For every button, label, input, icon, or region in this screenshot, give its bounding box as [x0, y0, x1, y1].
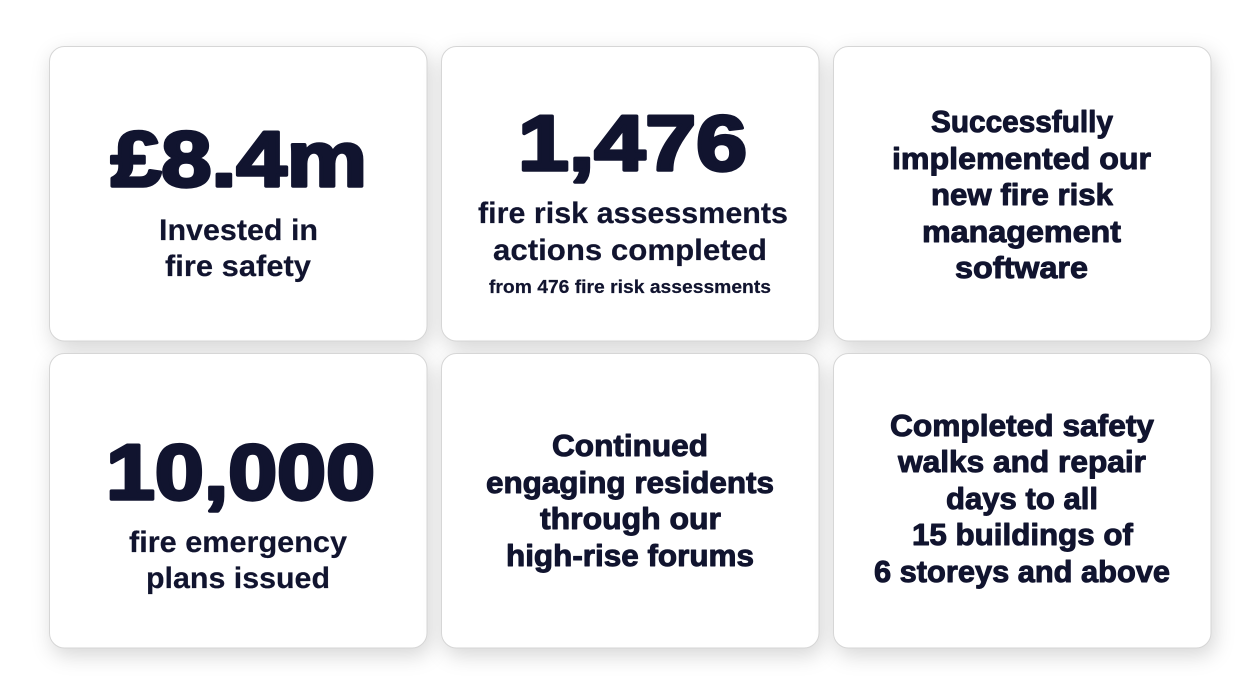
text: invested in fire safety — [159, 214, 318, 283]
text: fire risk assessments actions completed — [478, 197, 788, 267]
text: fire risk assessments actions completed: fire risk assessments — [478, 197, 788, 230]
text: fire emergency plans issued: fire emergency — [129, 526, 347, 559]
text: completed safety walks — [874, 408, 1170, 589]
text: fire risk assessments actions completed: actions completed — [493, 234, 767, 267]
text: successfully implemented software: new fire risk — [931, 177, 1114, 212]
text: continued engaging residents: high-rise forums — [506, 538, 754, 573]
panel: safety walks and repair days — [834, 354, 1211, 648]
text: completed safety walks: 6 storeys and above — [874, 554, 1170, 589]
text: fire emergency plans issued — [129, 526, 347, 595]
text: continued engaging residents: Continued — [552, 428, 708, 463]
text: successfully implemented software: software — [955, 250, 1088, 285]
big number: 1,476: 1,476 — [518, 99, 747, 187]
text: completed safety walks: 15 buildings of — [912, 517, 1134, 552]
text: continued engaging residents: through our — [540, 501, 721, 536]
big number: 10,000: 10,000 — [106, 428, 375, 516]
text: successfully implemented software: management — [922, 214, 1121, 249]
text: completed safety walks: walks and repair — [897, 444, 1146, 479]
text: successfully implemented software: implemented our — [892, 141, 1151, 176]
panel: 1,476 actions completed — [442, 46, 819, 341]
text: completed safety walks: days to all — [946, 481, 1098, 516]
text: invested in fire safety: Invested in — [159, 214, 318, 247]
panel: fire risk management software — [834, 46, 1211, 341]
text: successfully implemented software — [892, 104, 1151, 285]
text: completed safety walks: Completed safety — [890, 408, 1155, 443]
panel: 10,000 plans issued — [50, 354, 427, 648]
panel: high-rise forums — [442, 354, 819, 648]
text: continued engaging residents — [486, 428, 774, 573]
panel: £8.4m invested — [50, 46, 427, 341]
text: from 476 fire risk assessments: from 476 fire risk assessments — [489, 276, 771, 297]
text: fire emergency plans issued: plans issued — [146, 562, 330, 595]
big number: £8.4m: £8.4m — [111, 115, 367, 203]
text: invested in fire safety: fire safety — [165, 250, 311, 283]
text: successfully implemented software: Successfully — [931, 104, 1114, 139]
text: continued engaging residents: engaging residents — [486, 465, 774, 500]
